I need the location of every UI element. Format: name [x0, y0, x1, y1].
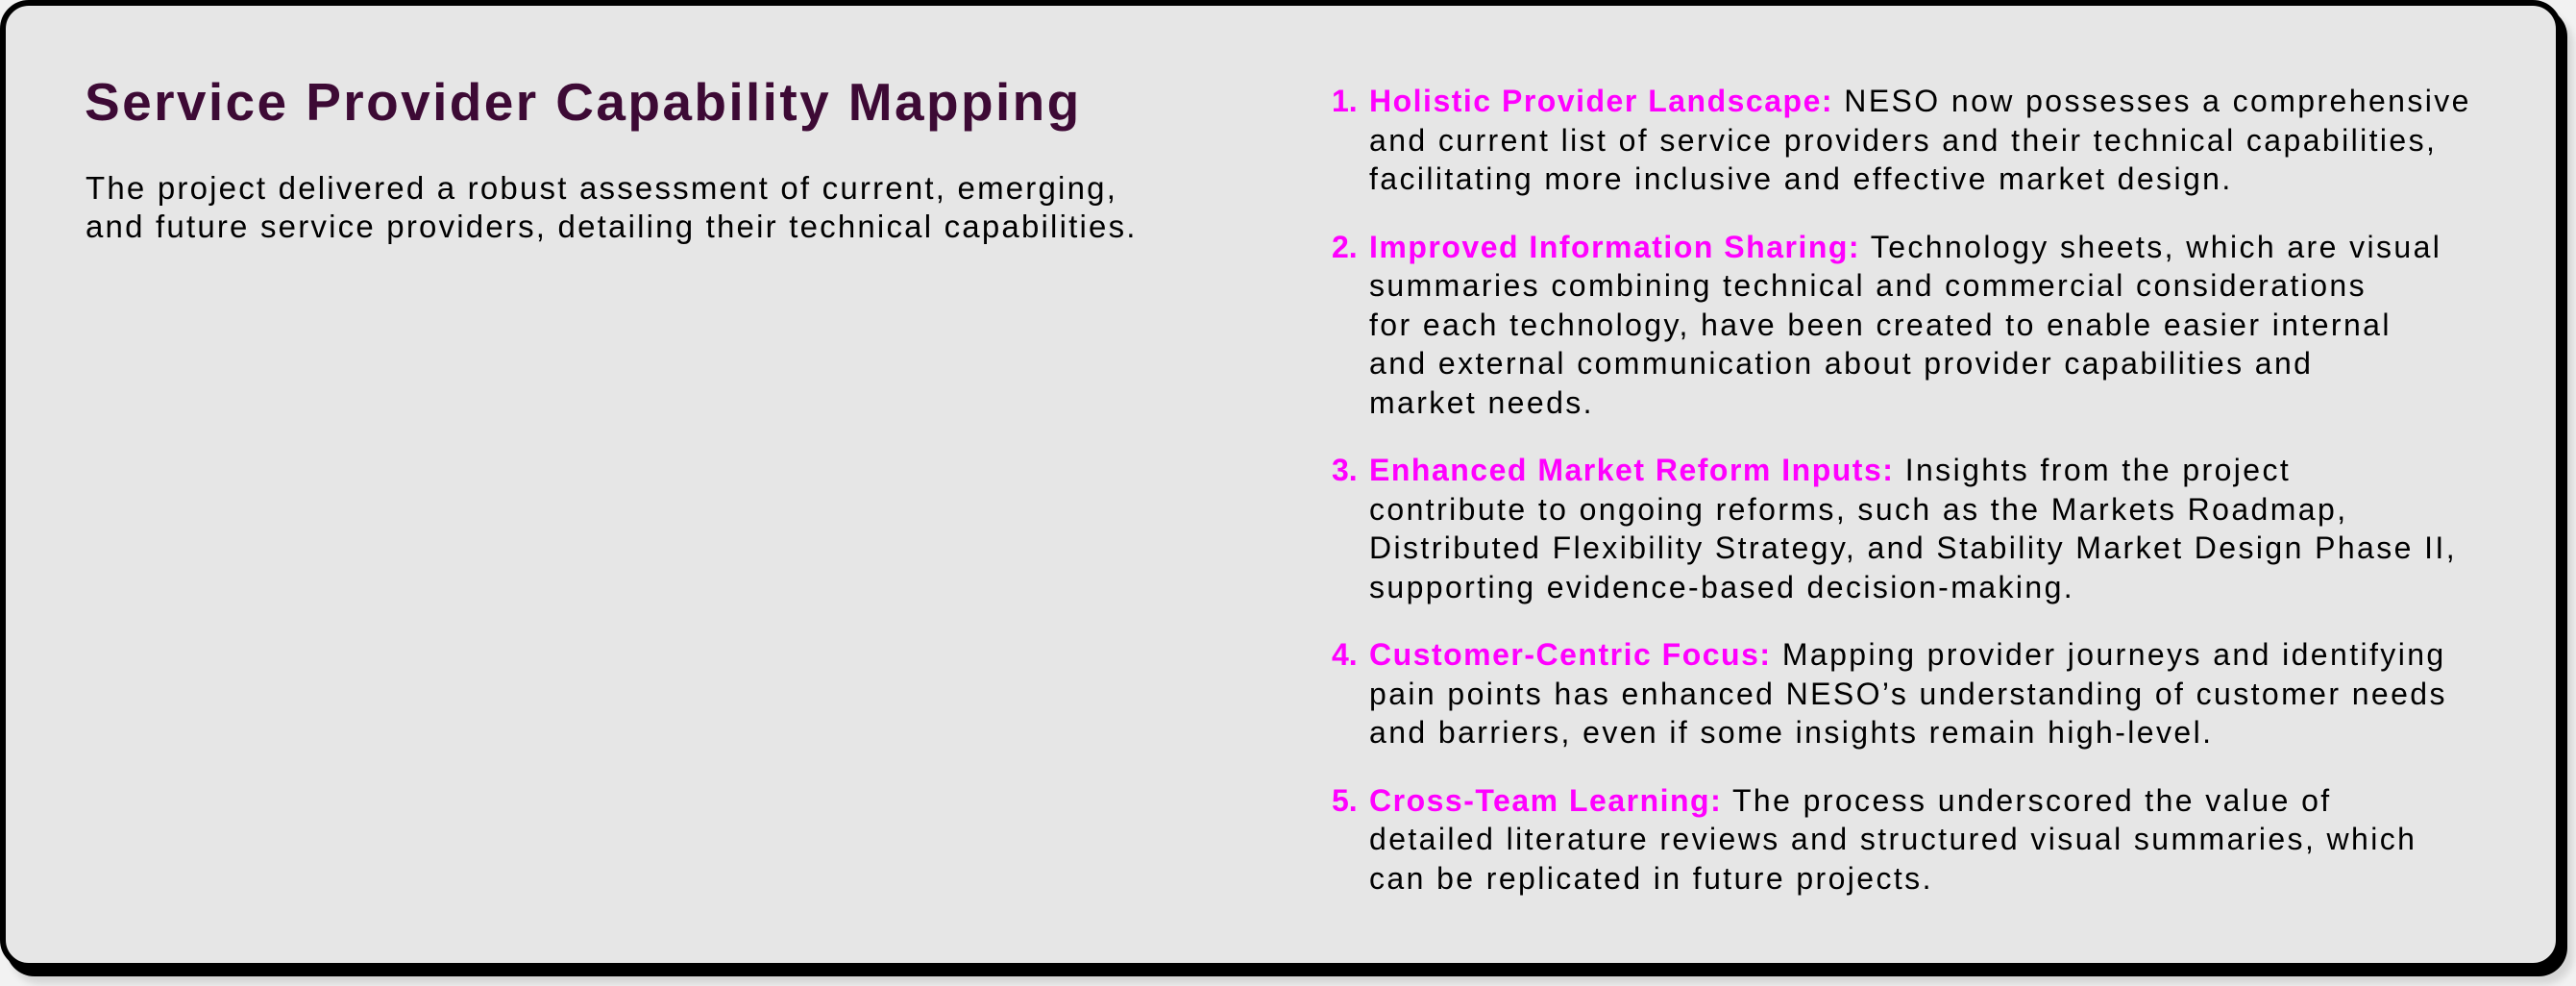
item 2 [1332, 229, 2441, 419]
item 2: summaries combining technical and commercial considerations [1369, 268, 2367, 303]
item 4: pain points has enhanced NESO’s understanding of customer needs [1369, 677, 2447, 711]
item 1 [1332, 84, 2471, 196]
item 2: market needs. [1369, 384, 1594, 419]
item 4: Customer-Centric Focus: Mapping provider journeys and identifying [1369, 637, 2446, 672]
item 2: Improved Information Sharing: Technology sheets, which are visual [1369, 229, 2441, 263]
item 5: 5. [1332, 782, 1358, 817]
item 5: Cross-Team Learning: The process underscored the value of [1369, 782, 2332, 817]
text block: intro [86, 170, 1138, 244]
item 3 [1332, 453, 2457, 604]
item 1: and current list of service providers and their technical capabilities, [1369, 123, 2437, 158]
title: Service Provider Capability Mapping [85, 72, 1082, 132]
item 4: 4. [1332, 637, 1358, 672]
item 3: contribute to ongoing reforms, such as the Markets Roadmap, [1369, 492, 2348, 527]
item 5: can be replicated in future projects. [1369, 861, 1933, 896]
item 5: detailed literature reviews and structured visual summaries, which [1369, 822, 2417, 856]
list: outcomes [1332, 84, 2471, 896]
item 1: facilitating more inclusive and effective market design. [1369, 161, 2233, 196]
item 3: Enhanced Market Reform Inputs: Insights from the project [1369, 453, 2291, 487]
item 2: and external communication about provider capabilities and [1369, 346, 2313, 381]
item 4 [1332, 637, 2447, 750]
item 2: 2. [1332, 229, 1358, 263]
item 5 [1332, 782, 2417, 896]
item 3: Distributed Flexibility Strategy, and Stability Market Design Phase II, [1369, 530, 2457, 565]
text block: intro: and future service providers, detailing their technical capabilities. [86, 209, 1138, 244]
item 2: for each technology, have been created to enable easier internal [1369, 308, 2392, 342]
text block: intro: The project delivered a robust assessment of current, emerging, [86, 170, 1117, 206]
item 1: Holistic Provider Landscape: NESO now possesses a comprehensive [1369, 84, 2471, 118]
item 4: and barriers, even if some insights remain high-level. [1369, 715, 2213, 750]
item 3: 3. [1332, 453, 1358, 487]
item 3: supporting evidence-based decision-making. [1369, 569, 2074, 604]
item 1: 1. [1332, 84, 1358, 118]
